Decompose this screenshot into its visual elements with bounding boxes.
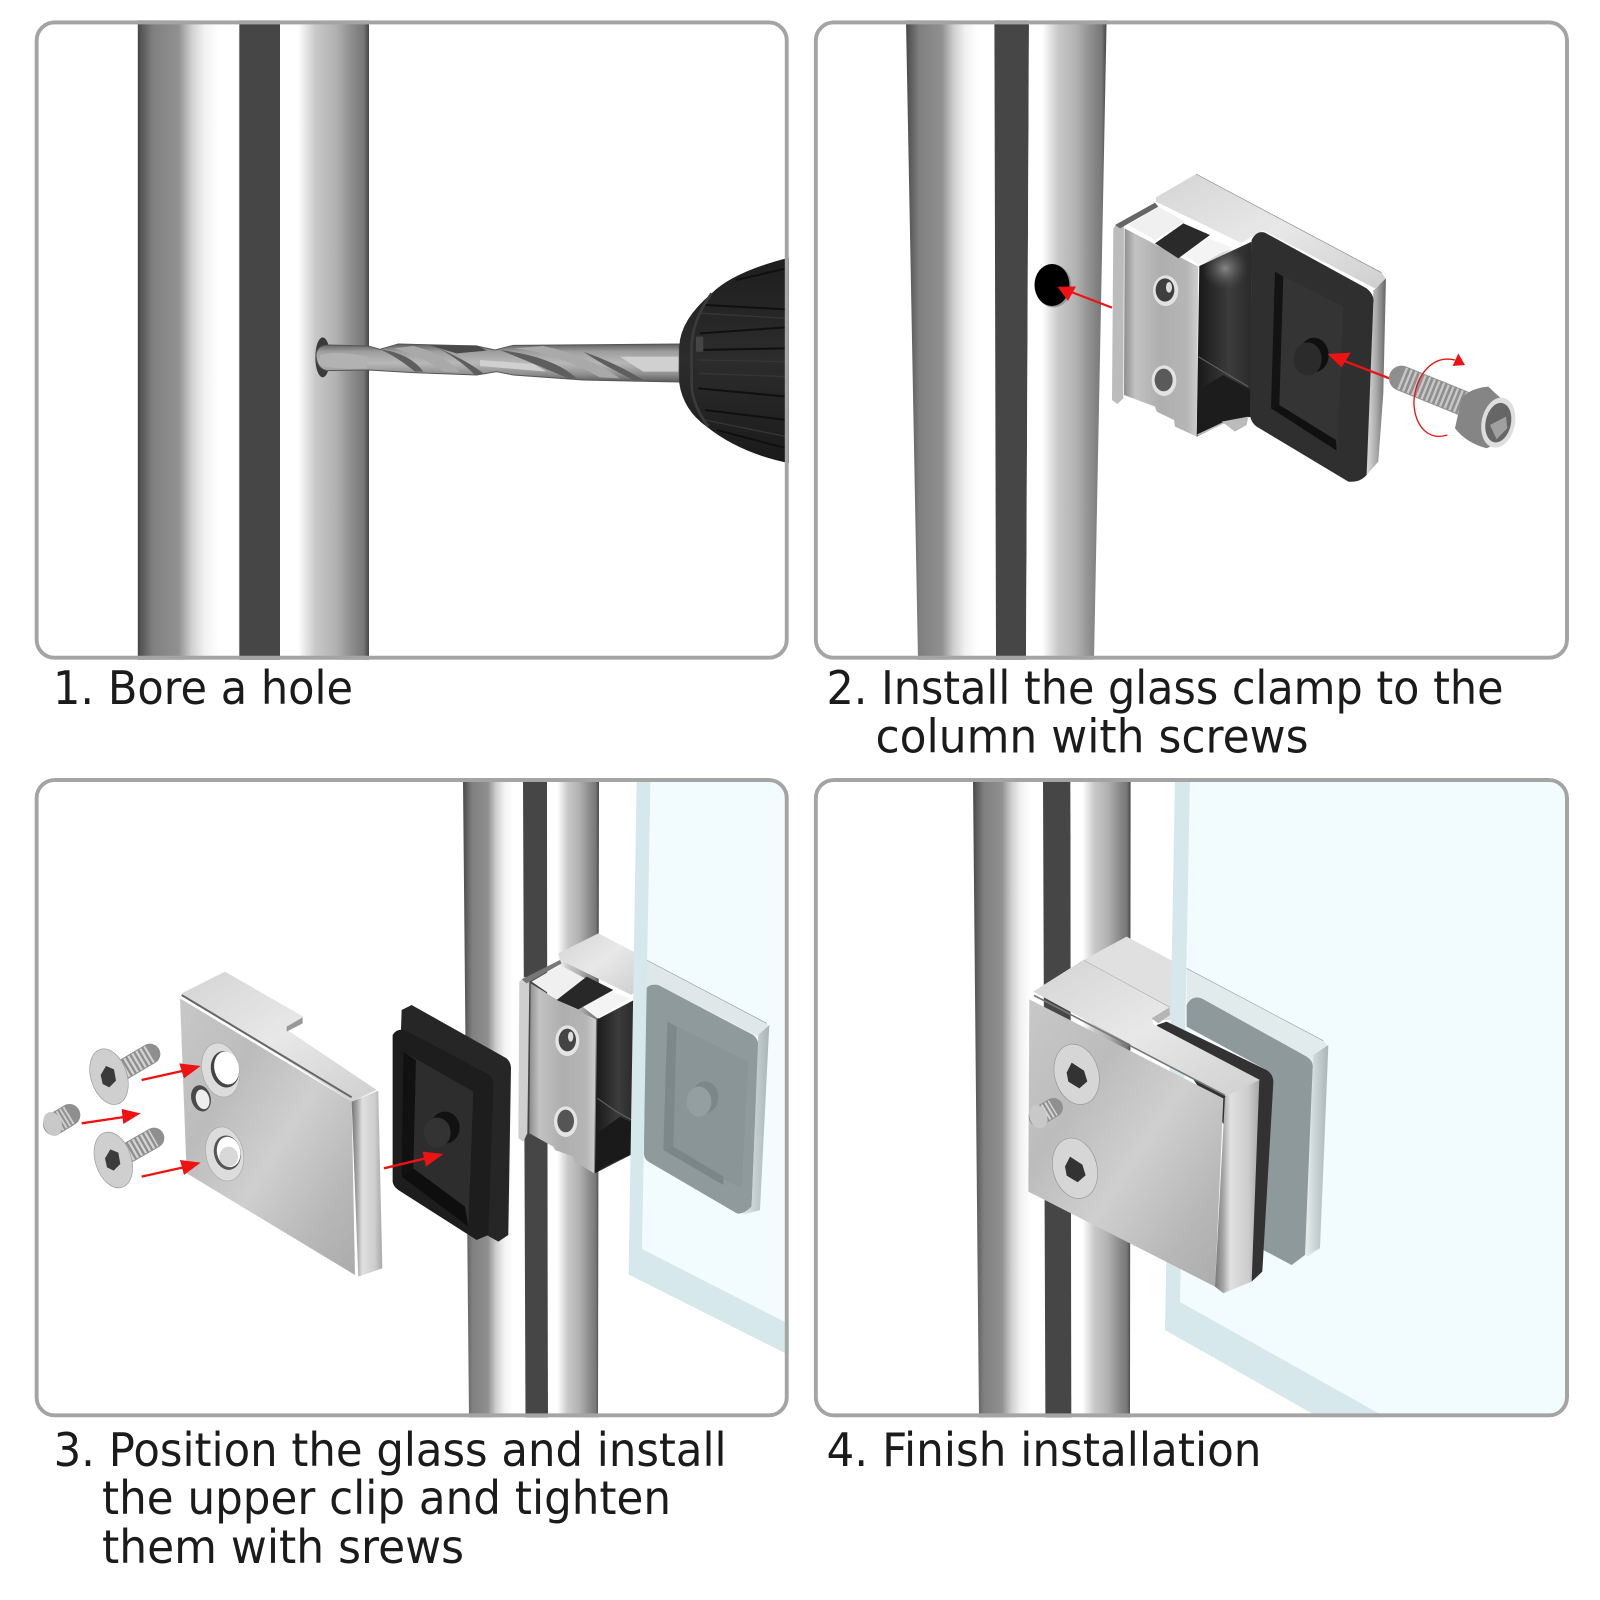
caption: step 2: 2. Install the glass clamp to the xyxy=(826,661,1504,715)
column xyxy=(138,20,369,660)
caption: step 3: the upper clip and tighten xyxy=(102,1471,671,1525)
rubber gasket xyxy=(393,1005,511,1242)
panel border xyxy=(816,22,1567,658)
caption: step 3 xyxy=(54,1423,727,1574)
arrow to hole xyxy=(1058,286,1112,308)
panel: step 1 bore a hole xyxy=(35,20,790,660)
panel: step 2 install the clamp xyxy=(814,20,1569,660)
caption: step 2 xyxy=(826,661,1504,764)
clamp rear top xyxy=(1033,937,1173,1020)
panel: step 3 position the glass xyxy=(35,778,789,1418)
panel: step 4 finish installation xyxy=(814,778,1570,1418)
caption: step 4: 4. Finish installation xyxy=(826,1423,1262,1477)
column xyxy=(463,778,599,1418)
caption: step 2: column with screws xyxy=(876,710,1308,764)
caption: step 1: 1. Bore a hole xyxy=(53,661,353,715)
drill bit xyxy=(315,337,679,382)
bored hole xyxy=(1034,264,1072,308)
red assembly arrows xyxy=(82,1063,443,1177)
glass pane xyxy=(1165,778,1570,1418)
caption: step 3: 3. Position the glass and install xyxy=(54,1423,727,1477)
column xyxy=(906,20,1107,660)
black gasket xyxy=(1157,1022,1273,1282)
socket screw with rotation arrow xyxy=(1402,353,1520,451)
rear plate through glass xyxy=(1187,968,1328,1265)
column xyxy=(973,778,1131,1418)
caption: step 3: them with srews xyxy=(102,1520,464,1574)
drill chuck xyxy=(679,257,790,463)
panel border xyxy=(37,22,787,658)
panel border xyxy=(37,780,787,1415)
clamp cover plate xyxy=(180,972,382,1277)
lower clamp behind the glass xyxy=(518,933,769,1215)
glass clamp lower part xyxy=(1112,174,1386,482)
flat head screws and set screw xyxy=(40,1044,154,1193)
glass pane interior xyxy=(642,778,789,1324)
panel border xyxy=(816,780,1567,1415)
glass pane edge xyxy=(629,778,789,1355)
arrow to knob xyxy=(1328,353,1389,378)
clamp cover xyxy=(1026,960,1260,1293)
